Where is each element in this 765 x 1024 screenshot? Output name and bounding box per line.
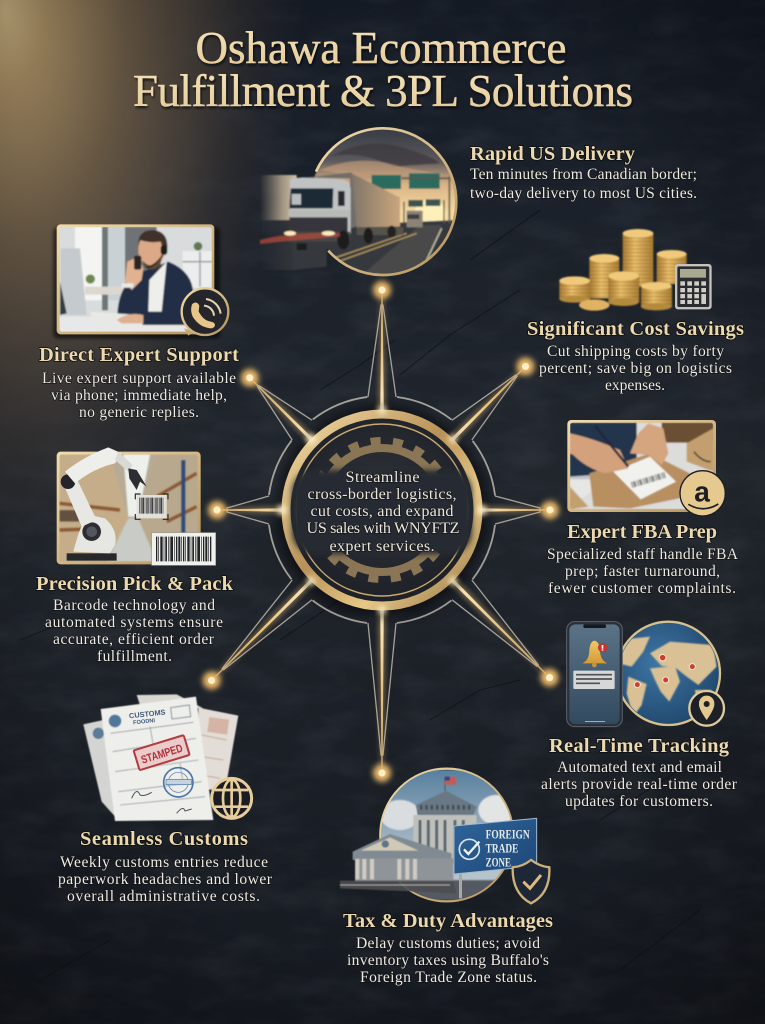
heading: Rapid US Delivery (470, 143, 636, 165)
icon: robot arm in warehouse (57, 447, 216, 565)
panel: direct expert support (39, 224, 239, 421)
title: Fulfillment & 3PL Solutions (134, 68, 634, 118)
title: Oshawa Ecommerce (196, 25, 568, 75)
center message: Streamline (346, 468, 420, 486)
description (541, 759, 738, 810)
center message: cut costs, and expand (310, 502, 454, 520)
description: no generic replies. (79, 404, 199, 421)
icon: world globe with pins (567, 622, 724, 727)
description: alerts provide real-time order (541, 776, 738, 793)
description: fulfillment. (97, 648, 172, 665)
description: Specialized staff handle FBA (547, 546, 739, 563)
center message: US sales with WNYFTZ (306, 519, 460, 537)
description: accurate, efficient order (53, 631, 215, 648)
panel: seamless customs (58, 694, 273, 905)
description: automated systems ensure (45, 614, 223, 631)
icon: phone badge (182, 288, 228, 336)
stamp: round seal (164, 768, 193, 797)
heading: Direct Expert Support (39, 344, 239, 366)
heading: Expert FBA Prep (567, 521, 717, 543)
icon: amazon badge (680, 471, 725, 516)
description: two-day delivery to most US cities. (470, 185, 697, 202)
heading: Real-Time Tracking (549, 735, 730, 757)
description: Delay customs duties; avoid (356, 935, 540, 952)
title: Fulfillment & 3PL Solutions (133, 66, 633, 116)
stamp: stamped: STAMPED (140, 743, 184, 767)
icon: phone with notification (567, 622, 622, 727)
icon: globe badge (212, 778, 252, 818)
panel: tax and duty advantages (340, 769, 553, 986)
panel: precision pick and pack (36, 447, 234, 665)
robot arm (61, 447, 147, 561)
description (347, 935, 549, 986)
description (45, 597, 223, 665)
icon: government building and trade zone sign (340, 769, 549, 903)
description: Ten minutes from Canadian border; (470, 166, 697, 183)
icon: packing photo (567, 420, 725, 516)
barcode scan target (135, 494, 168, 519)
icon: amazon badge: a (694, 477, 710, 509)
central hub (276, 406, 488, 618)
foreign trade zone sign: FOREIGN (486, 827, 530, 841)
shield badge (513, 860, 549, 903)
description: paperwork headaches and lower (58, 871, 273, 888)
center message: expert services. (330, 537, 434, 555)
description: Weekly customs entries reduce (60, 854, 268, 871)
description: Live expert support available (42, 370, 236, 387)
description (547, 546, 739, 597)
panel: significant cost savings (527, 229, 744, 394)
icon: gold coin stacks and calculator (559, 229, 712, 311)
gear emblem (313, 441, 451, 579)
icon: customs forms and globe badge: CUSTOMS (129, 708, 166, 720)
description: Foreign Trade Zone status. (360, 969, 537, 986)
icon: truck on highway (260, 128, 457, 277)
description (470, 166, 697, 202)
description: fewer customer complaints. (548, 580, 736, 597)
description: overall administrative costs. (67, 888, 260, 905)
description (42, 370, 236, 421)
icon: customs forms and globe badge (83, 694, 252, 821)
spokes with glowing endpoints (195, 281, 566, 782)
stamp: stamped (134, 735, 190, 770)
foreign trade zone sign: TRADE (486, 841, 518, 855)
foreign trade zone sign (454, 818, 537, 898)
description: inventory taxes using Buffalo's (347, 952, 549, 969)
barcode sticker (152, 533, 216, 565)
icon: customs forms and globe badge: FOODNI (133, 718, 156, 726)
description: Cut shipping costs by forty (547, 343, 724, 360)
heading: Tax & Duty Advantages (343, 910, 553, 932)
description: via phone; immediate help, (51, 387, 227, 404)
center message (306, 468, 460, 555)
heading: Significant Cost Savings (527, 318, 744, 340)
description: percent; save big on logistics (539, 360, 732, 377)
icon: location pin badge (689, 691, 724, 726)
description: Automated text and email (557, 759, 723, 776)
panel: expert FBA prep (547, 420, 739, 597)
heading: Precision Pick & Pack (36, 573, 234, 595)
foreign trade zone sign: ZONE (486, 855, 511, 869)
description (58, 854, 273, 905)
heading: Seamless Customs (80, 828, 248, 850)
description: updates for customers. (565, 793, 713, 810)
panel: rapid US delivery (260, 128, 697, 277)
radial hub diagram (195, 281, 566, 782)
panel: real-time tracking (541, 622, 738, 810)
title: Oshawa Ecommerce (196, 23, 566, 73)
center message: cross-border logistics, (308, 485, 456, 503)
description: expenses. (605, 377, 665, 394)
description: Barcode technology and (53, 597, 215, 614)
title (133, 23, 634, 118)
description: prep; faster turnaround, (565, 563, 720, 580)
description (539, 343, 732, 394)
icon: support agent photo (53, 224, 228, 339)
